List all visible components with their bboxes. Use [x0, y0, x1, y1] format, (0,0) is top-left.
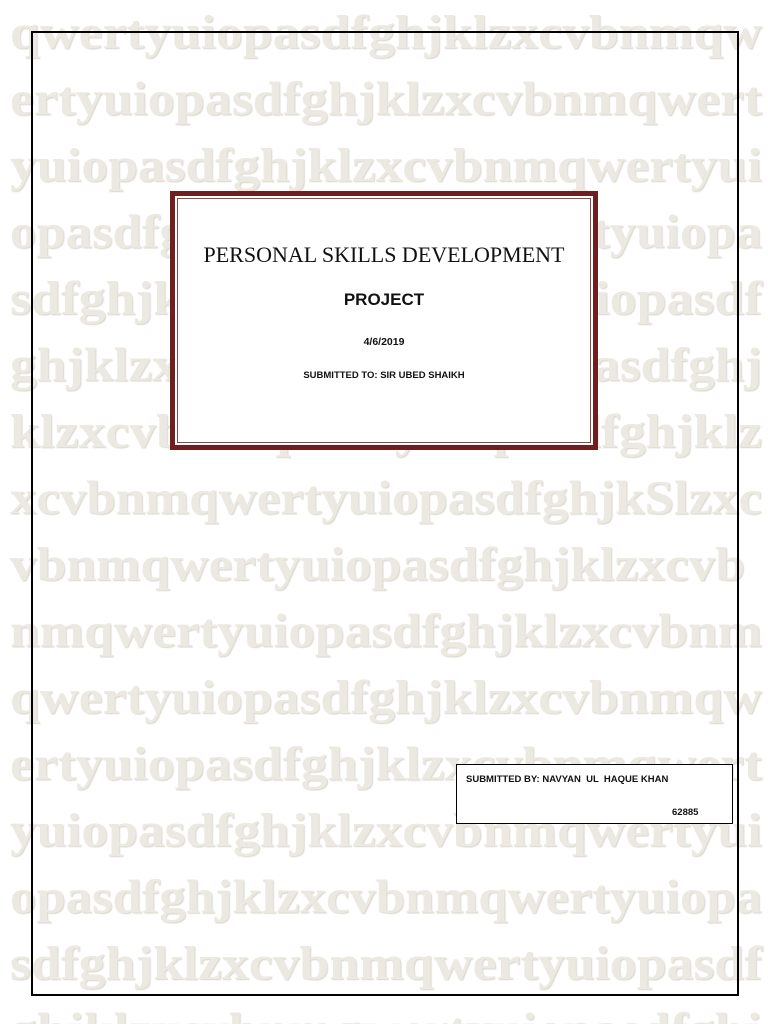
title: PERSONAL SKILLS DEVELOPMENT — [204, 242, 564, 267]
background letter pattern: klzxcvbnmqwertyuiopasdfghjklz — [10, 405, 762, 458]
title box — [170, 191, 598, 450]
background letter pattern: ertyuiopasdfghjklzxcvbnmqwert — [10, 72, 762, 126]
background letter pattern: yuiopasdfghjklzxcvbnmqwertyui — [10, 804, 762, 857]
subtitle: project: PROJECT — [344, 290, 424, 309]
background letter pattern: vbnmqwertyuiopasdfghjklzxcvb — [10, 538, 745, 591]
background letter pattern: yuiopasdfghjklzxcvbnmqwertyui — [10, 139, 762, 192]
background letter pattern: opasdfghjklzxcvbnmqwertyuiopa — [10, 870, 762, 924]
background letter pattern: xcvbnmqwertyuiopasdfghjkSlzxc — [10, 472, 762, 524]
background letter pattern: sdfghjklzxcvbnmqwertyuiopasdf — [10, 272, 763, 325]
id number: 62885 — [672, 807, 698, 818]
background letter pattern: opasdfghjklzxcvbnmqwertyuiopa — [10, 206, 762, 258]
background letter pattern: nmqwertyuiopasdfghjklzxcvbnm — [10, 604, 762, 658]
background letter pattern: sdfghjklzxcvbnmqwertyuiopasdf — [10, 937, 763, 990]
submitted by box — [456, 764, 733, 824]
background letter pattern: qwertyuiopasdfghjklzxcvbnmqw — [10, 671, 762, 724]
background letter pattern: ghjklzxcvbnmqwertyuiopasdfghj — [10, 338, 762, 392]
submitted to: SUBMITTED TO: SIR UBED SHAIKH — [303, 370, 465, 381]
background letter pattern: ertyuiopasdfghjklzxcvbnmqwert — [10, 738, 762, 790]
date: 4/6/2019 — [364, 336, 404, 348]
submitted by text: SUBMITTED BY: NAVYAN UL HAQUE KHAN — [466, 774, 668, 785]
background letter pattern: qwertyuiopasdfghjklzxcvbnmqw — [10, 6, 762, 59]
